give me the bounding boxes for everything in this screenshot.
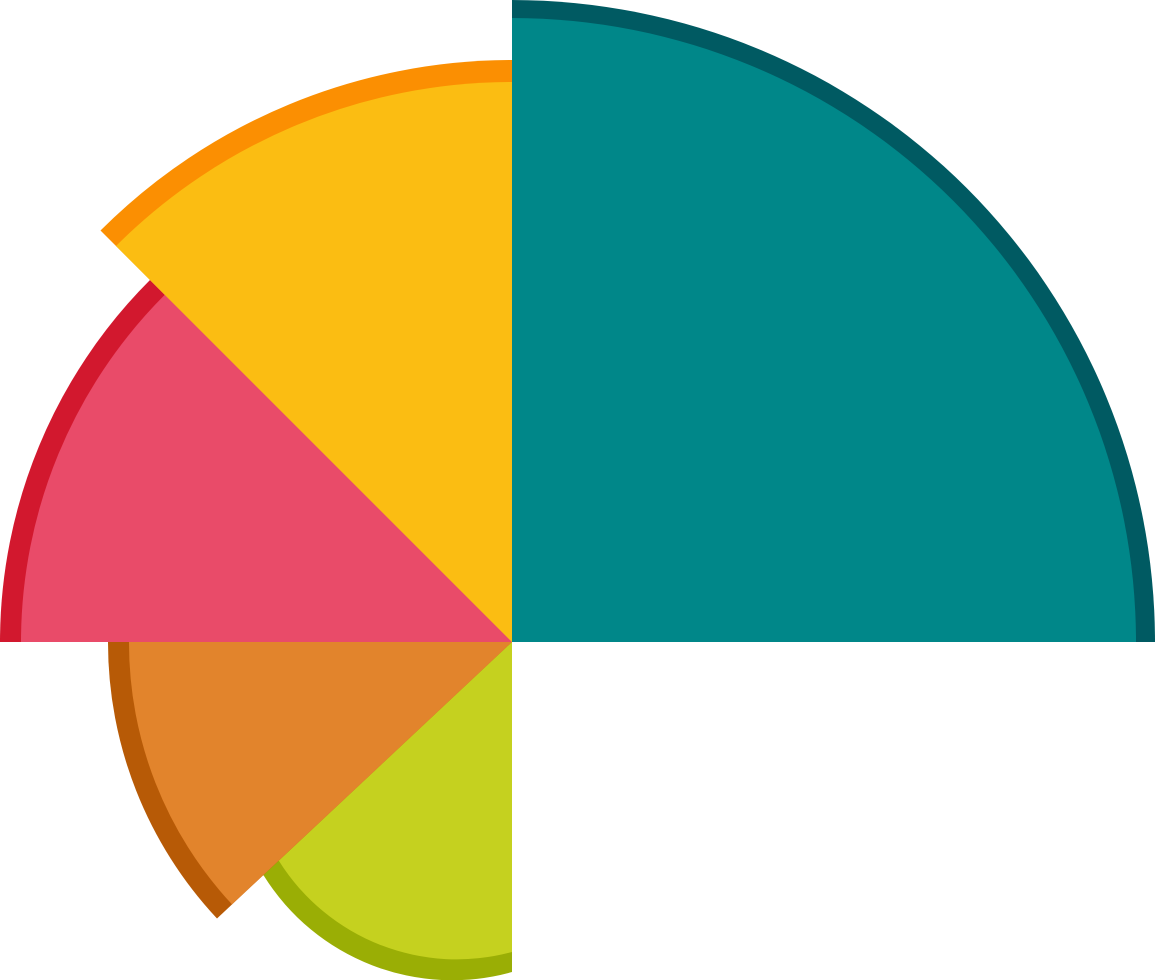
slice: teal [512,0,1155,642]
slice: red [0,280,512,642]
slice: green [250,642,512,980]
slice: orange [108,642,512,918]
slice: yellow [100,60,512,642]
